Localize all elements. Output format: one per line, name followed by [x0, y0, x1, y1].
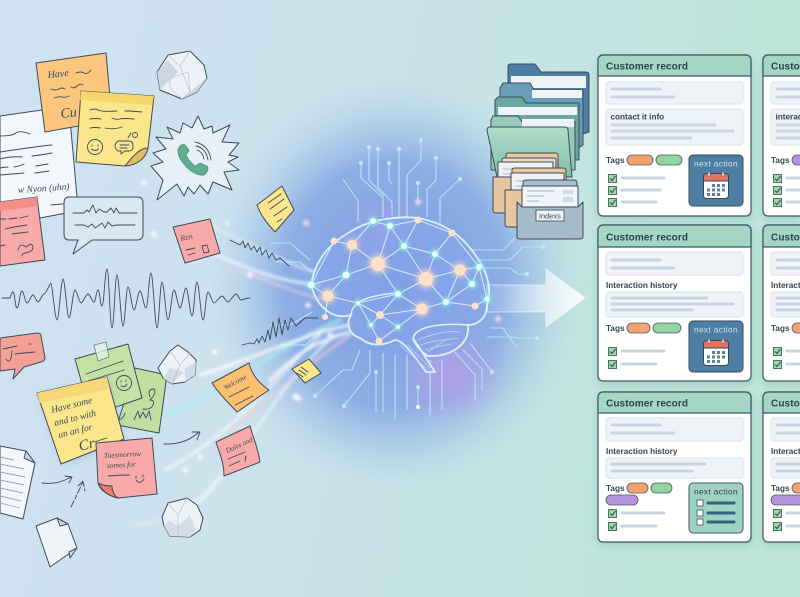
brain: [306, 216, 492, 372]
tags: Tags: [606, 324, 625, 333]
field label: contact it info: [610, 112, 664, 122]
tape: [94, 342, 109, 361]
arrow: right: [164, 432, 200, 444]
glowing nodes: [306, 216, 492, 344]
speech bubble: red: [0, 333, 45, 379]
brain glow: [210, 80, 580, 490]
arrow: dashed up: [71, 481, 85, 507]
arrow: left: [42, 476, 72, 483]
sticky note: orange curled: [212, 363, 269, 412]
sticky note: large yellow: and to with: [53, 409, 97, 429]
circuit traces around brain: [270, 138, 545, 420]
tags: [606, 155, 682, 165]
next action: next action: [694, 486, 738, 496]
field label: Interaction history: [606, 281, 678, 290]
panel: customer record, row 3: [598, 392, 751, 542]
index drawer: indexs: [539, 212, 561, 220]
panel: customer record, row 1 column 2: [763, 55, 800, 216]
document page bottom: [36, 518, 77, 567]
icon: phone: [178, 142, 211, 175]
sticky note: large yellow: [37, 377, 126, 467]
tan file box: [493, 153, 558, 213]
sticky note: small red: Ren: [179, 232, 194, 243]
handwritten letter page: [0, 108, 77, 222]
speech bubble with waveform: [64, 197, 143, 254]
sticky note: red with heart: [0, 197, 45, 266]
tags: [606, 323, 681, 333]
next action: [689, 155, 743, 206]
sticky note: pink with curl: somes for: [107, 459, 136, 470]
field label: Interaction history: [606, 447, 678, 456]
heading: Customer record: [606, 62, 688, 72]
sticky note: yellow with smiley: [76, 91, 154, 166]
checklist: [608, 174, 664, 206]
sticky note: orange: Have: [46, 68, 70, 81]
heading: Customer record: [606, 398, 688, 410]
sticky note: orange: [36, 53, 112, 132]
document page left: [0, 446, 35, 519]
panel: customer record, row 3 column 2: [763, 392, 800, 542]
small waveform lower: [242, 318, 318, 345]
next action: next action: [694, 324, 738, 334]
sticky note: orange curled: Welcome: [222, 373, 248, 392]
brain outline: [311, 217, 489, 372]
index drawer: [517, 180, 583, 239]
handwritten letter page: w Nyon (uhn): [17, 181, 70, 196]
tags: Tags: [606, 156, 625, 165]
panel: customer record, row 2 column 2: Tags: [771, 324, 790, 333]
next action: [689, 483, 743, 533]
crumpled paper middle: [158, 345, 196, 384]
card shadows: [597, 58, 800, 546]
sticky note: orange: Cu: [60, 105, 78, 122]
main waveform: [2, 269, 250, 328]
panel: customer record, row 2: [598, 225, 751, 381]
arrow pointing to records: [487, 269, 585, 327]
sticky note: yellow small top: [257, 186, 294, 232]
panel: customer record, row 2 column 2: [763, 225, 800, 381]
crumpled paper top: [157, 51, 207, 99]
small sticky note near brain: [292, 359, 321, 383]
next action: [689, 321, 743, 372]
sticky note: pink with curl: Tuesmorrow: [104, 449, 141, 460]
panel: customer record, row 1 column 2: Tags: [771, 156, 790, 165]
crumpled paper bottom: [162, 498, 203, 537]
tags: [606, 483, 672, 505]
checklist: [608, 510, 664, 530]
small waveform upper: [230, 240, 289, 266]
neural network links: [311, 220, 487, 341]
heading: Customer record: [606, 232, 688, 244]
sticky note: small red: [173, 219, 220, 263]
speech burst with phone icon: [151, 116, 239, 200]
sticky note: pink curled: [216, 426, 260, 476]
tan file box front: [505, 168, 566, 227]
tags: Tags: [606, 484, 625, 493]
checklist: [608, 348, 664, 368]
folder stack: [487, 64, 589, 239]
data streams flowing into brain: [135, 180, 350, 525]
sticky note: large yellow: Cr: [77, 435, 96, 455]
next action: next action: [694, 158, 738, 168]
sticky note: large yellow: un an for: [57, 422, 94, 441]
sticky note: pink curled: Dales and: [224, 436, 254, 455]
sticky note: large yellow: Have some: [49, 396, 93, 416]
panel: customer record, row 3 column 2: Tags: [771, 484, 790, 493]
sticky note: green with tape: [75, 342, 167, 433]
sticky note: pink with curl: [96, 438, 157, 498]
panel: customer record, row 1: [598, 55, 751, 216]
